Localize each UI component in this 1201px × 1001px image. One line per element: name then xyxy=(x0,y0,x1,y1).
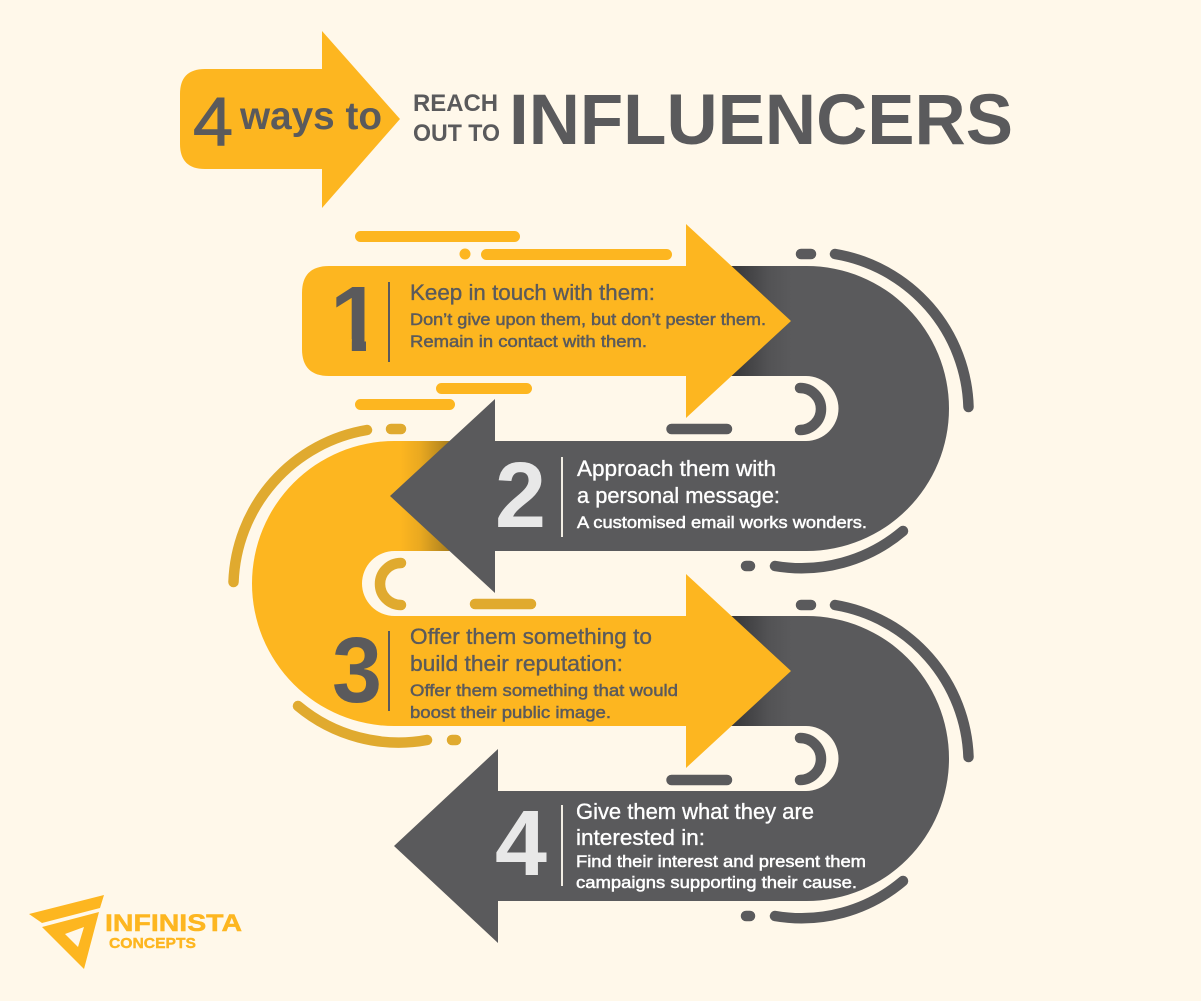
title: reach: REACH xyxy=(413,90,498,117)
curve: gray connector 1 to 2 xyxy=(480,266,949,551)
title: ways to: ways to xyxy=(239,95,382,138)
step 2 heading xyxy=(577,456,780,508)
step 4 body: campaigns supporting their cause. xyxy=(576,873,857,892)
step 4 arrow xyxy=(394,749,866,943)
accents: gray around connector 3 xyxy=(672,605,968,918)
accents: yellow speed bars xyxy=(355,231,672,410)
title xyxy=(180,31,1013,208)
step 1 arrow xyxy=(302,224,791,418)
step 3 body: boost their public image. xyxy=(410,703,611,722)
logo mark xyxy=(29,895,104,969)
step 4 heading: Give them what they are xyxy=(576,799,814,824)
step 4 number: 4 xyxy=(495,791,547,895)
step 3 body xyxy=(410,681,678,722)
title: out to: OUT TO xyxy=(413,120,500,147)
step 2 body: A customised email works wonders. xyxy=(577,513,867,532)
step 4 heading xyxy=(576,799,814,850)
step 2 arrow xyxy=(390,399,867,593)
step 3 heading: Offer them something to xyxy=(410,624,652,649)
accents: gray around connector 1 xyxy=(672,254,968,568)
step 1 body xyxy=(410,310,766,351)
step 4 heading: interested in: xyxy=(576,825,705,850)
logo subline: CONCEPTS xyxy=(109,935,196,952)
step 3 heading: build their reputation: xyxy=(410,651,623,676)
step 3 heading xyxy=(410,624,652,676)
accents: gold around connector 2 xyxy=(234,429,531,743)
step 3 arrow xyxy=(332,574,791,768)
step 2 heading: a personal message: xyxy=(577,483,780,508)
logo wordmark: INFINISTA xyxy=(105,910,242,937)
curve: yellow connector 2 to 3 xyxy=(252,441,700,726)
step 3 body: Offer them something that would xyxy=(410,681,678,700)
step 3 number: 3 xyxy=(332,618,382,722)
step 2 heading: Approach them with xyxy=(577,456,776,481)
step 1 heading: Keep in touch with them: xyxy=(410,280,655,305)
step 1 number: 1 xyxy=(330,267,382,371)
title: influencers: INFLUENCERS xyxy=(509,81,1013,160)
step 4 body: Find their interest and present them xyxy=(576,852,866,871)
logo xyxy=(29,895,242,969)
title arrow xyxy=(180,31,400,208)
step 4 body xyxy=(576,852,866,892)
step 2 number: 2 xyxy=(495,443,546,547)
step 1 body: Remain in contact with them. xyxy=(410,332,647,351)
title number 4: 4 xyxy=(193,83,233,160)
step 1 body: Don’t give upon them, but don’t pester them. xyxy=(410,310,766,329)
curve: gray connector 3 to 4 xyxy=(480,616,949,901)
